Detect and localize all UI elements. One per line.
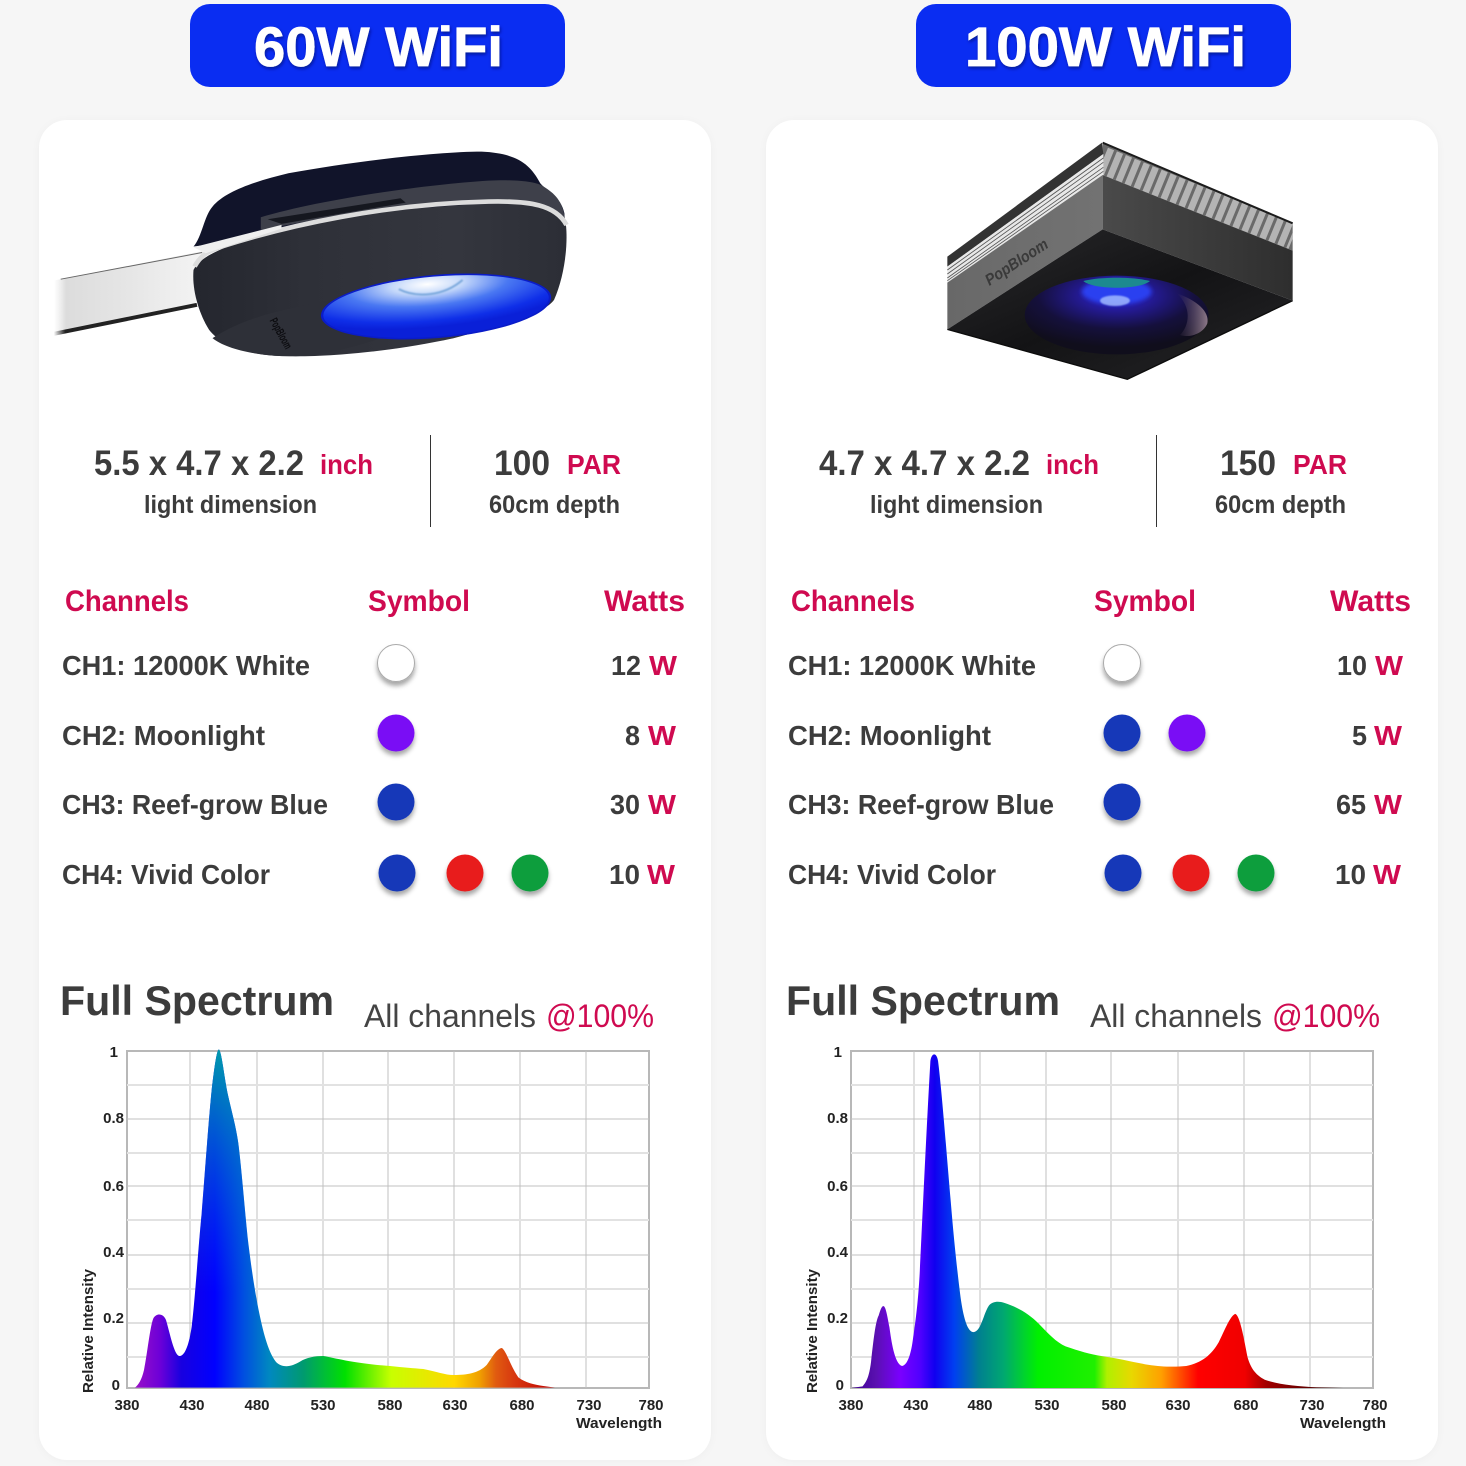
chart: 100W spectrum: 0.6 [827,1178,848,1195]
chart: 100W spectrum: Wavelength [1300,1415,1386,1432]
channels table: 8 [625,720,640,751]
channels table: W [1374,720,1403,751]
chart: 60W spectrum: 730 [576,1397,602,1414]
channels table: CH2: Moonlight [62,720,265,751]
heading: Full Spectrum [60,977,654,1034]
spec: light dimension: 4.7 x 4.7 x 2.2 [819,444,1030,483]
chart: 60W spectrum: 1 [110,1044,118,1061]
product image: 60W round lamp: PopBloom [267,316,294,351]
chart: 60W spectrum: 0.4 [103,1244,125,1261]
product image: 60W round lamp [54,152,567,356]
heading: Full Spectrum: All channels [1090,998,1262,1034]
spec: PAR: PAR [567,449,621,480]
channels table [62,585,685,892]
chart: 60W spectrum: 630 [442,1397,468,1414]
chart: 60W spectrum: 0.8 [103,1110,124,1127]
spec: PAR: 150 [1220,444,1276,483]
chart: 100W spectrum: 480 [967,1397,993,1414]
spec: PAR [1215,444,1347,519]
chart: 60W spectrum: 430 [179,1397,205,1414]
heading: Full Spectrum: Full Spectrum [786,977,1060,1024]
spec: PAR [489,444,621,519]
panel: 60W WiFi [39,4,711,1460]
chart: 100W spectrum: Relative Intensity [804,1268,821,1393]
chart: 60W spectrum: Relative Intensity [80,1268,97,1393]
chart: 100W spectrum: 680 [1233,1397,1259,1414]
channels table: CH2: Moonlight [788,720,991,751]
heading: Full Spectrum: Full Spectrum [60,977,334,1024]
chart: 100W spectrum: 0 [836,1377,844,1394]
chart: 60W spectrum: 380 [114,1397,140,1414]
chart: 100W spectrum: 530 [1034,1397,1060,1414]
channels table: 10 [609,859,640,890]
heading pill: 100W WiFi [916,4,1291,87]
chart: 100W spectrum: 380 [838,1397,864,1414]
chart: 100W spectrum: 0.4 [827,1244,849,1261]
channels table: W [1375,650,1404,681]
channels table: Channels [65,585,189,618]
heading: Full Spectrum: @100% [1272,998,1380,1034]
spec: light dimension: inch [1046,449,1099,480]
channels table: CH4: Vivid Color [62,859,270,890]
chart: 60W spectrum: Wavelength [576,1415,662,1432]
chart: 60W spectrum: 680 [509,1397,535,1414]
channels table: CH1: 12000K White [788,650,1036,681]
spec: light dimension: light dimension [870,491,1043,519]
spec: light dimension [94,444,373,519]
spec: light dimension: 5.5 x 4.7 x 2.2 [94,444,304,483]
chart: 60W spectrum [80,1044,664,1432]
chart: 100W spectrum: 0.8 [827,1110,848,1127]
chart: 60W spectrum: 0 [112,1377,120,1394]
spec: PAR: 60cm depth [489,491,620,519]
channels table: Symbol [368,585,470,618]
chart: 100W spectrum [804,1044,1388,1432]
channels table: W [1374,789,1403,820]
channels table: 12 [611,650,641,681]
channels table: W [647,859,676,890]
card background [766,120,1438,1460]
heading: Full Spectrum [786,977,1380,1034]
chart: 60W spectrum: 0.2 [103,1310,124,1327]
channels table: 65 [1336,789,1366,820]
chart: 100W spectrum: 1 [834,1044,842,1061]
chart: 100W spectrum: 780 [1362,1397,1388,1414]
spec: PAR: 60cm depth [1215,491,1346,519]
heading pill: 60W WiFi: 60W WiFi [254,15,503,78]
channels table: Symbol [1094,585,1196,618]
chart: 100W spectrum: 730 [1299,1397,1325,1414]
heading: Full Spectrum: @100% [546,998,654,1034]
channels table: CH4: Vivid Color [788,859,996,890]
panel: 100W WiFi [766,4,1438,1460]
channels table: W [648,789,677,820]
channels table: W [648,720,677,751]
product image: 100W square lamp [947,143,1293,379]
channels table: Watts [604,585,685,618]
spec: light dimension [819,444,1099,519]
channels table: 5 [1352,720,1367,751]
channels table [788,585,1411,892]
card background [39,120,711,1460]
spec: PAR: 100 [494,444,550,483]
spec: PAR: PAR [1293,449,1347,480]
chart: 60W spectrum: 780 [638,1397,664,1414]
product image: 100W square lamp: PopBloom [982,236,1052,289]
channels table: W [1373,859,1402,890]
channels table: Channels [791,585,915,618]
chart: 100W spectrum: 630 [1165,1397,1191,1414]
channels table: Watts [1330,585,1411,618]
channels table: 30 [610,789,640,820]
chart: 100W spectrum: 0.2 [827,1310,848,1327]
chart: 100W spectrum: 430 [903,1397,929,1414]
channels table: 10 [1335,859,1366,890]
channels table: CH3: Reef-grow Blue [62,789,328,820]
chart: 100W spectrum: 580 [1101,1397,1127,1414]
spec: light dimension: inch [320,449,373,480]
channels table: 10 [1337,650,1367,681]
chart: 60W spectrum: 0.6 [103,1178,124,1195]
chart: 60W spectrum: 580 [377,1397,403,1414]
heading pill: 60W WiFi [190,4,565,87]
channels table: CH1: 12000K White [62,650,310,681]
heading pill: 100W WiFi: 100W WiFi [965,15,1246,78]
heading: Full Spectrum: All channels [364,998,536,1034]
spec: light dimension: light dimension [144,491,317,519]
channels table: W [649,650,678,681]
chart: 60W spectrum: 480 [244,1397,270,1414]
chart: 60W spectrum: 530 [310,1397,336,1414]
channels table: CH3: Reef-grow Blue [788,789,1054,820]
